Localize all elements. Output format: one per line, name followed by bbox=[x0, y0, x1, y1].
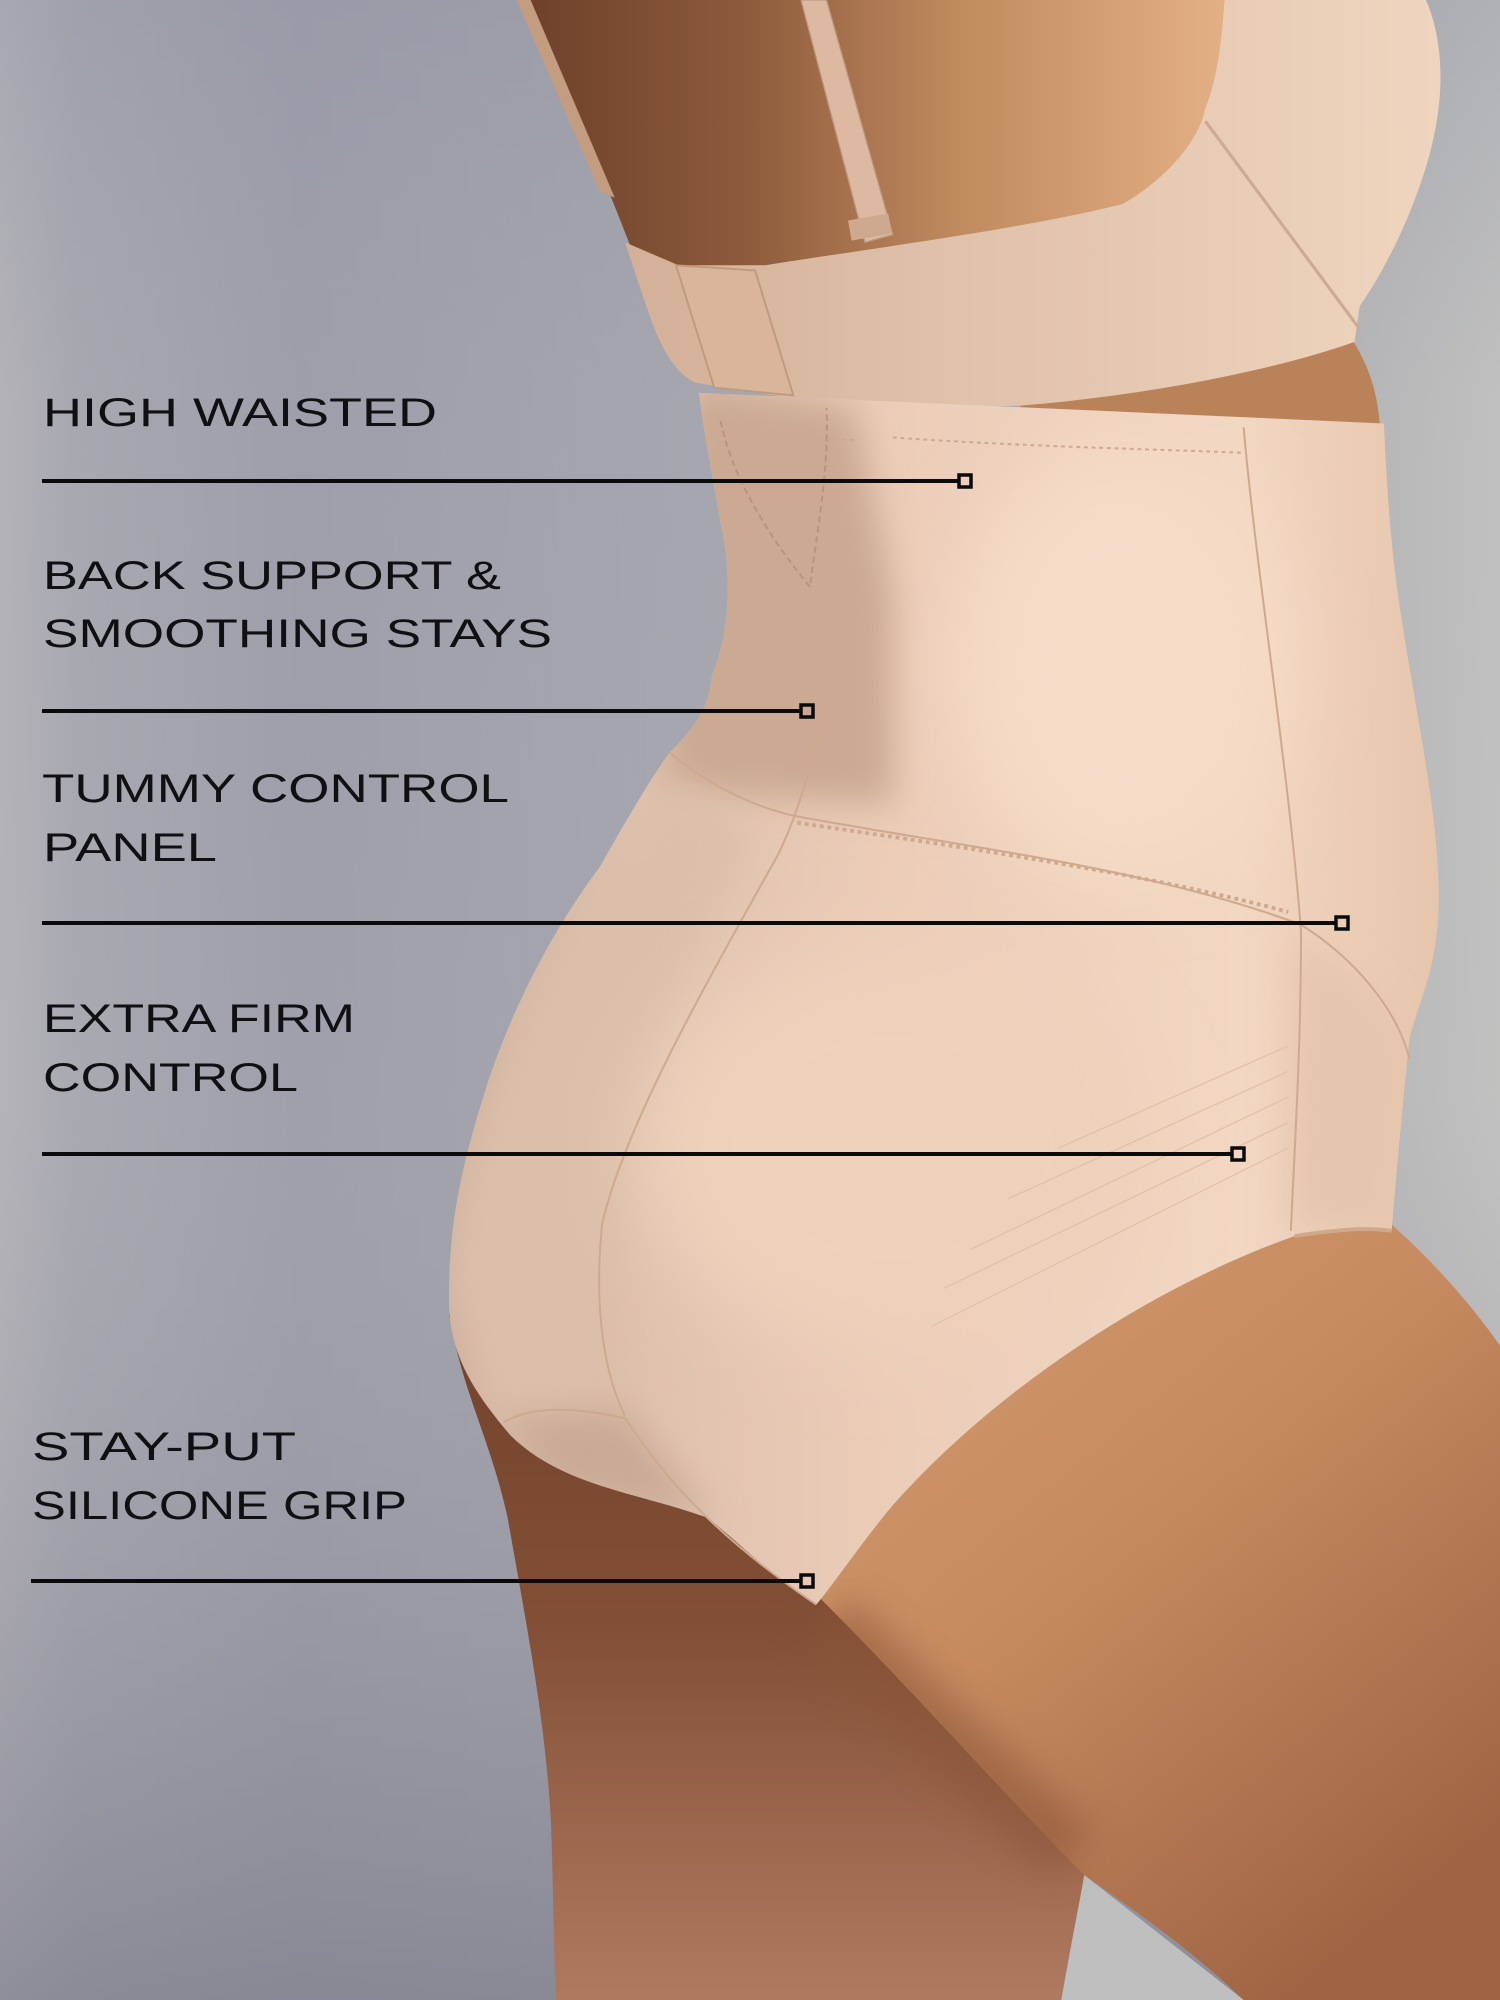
label: SILICONE GRIP bbox=[32, 1484, 407, 1528]
callout: back support bbox=[42, 554, 813, 717]
label bbox=[43, 997, 355, 1100]
label bbox=[32, 1425, 407, 1528]
wall patch between legs bbox=[1061, 1875, 1244, 2000]
callout: high waisted bbox=[42, 391, 971, 487]
leader line bbox=[42, 1148, 1244, 1160]
leader line bbox=[42, 705, 813, 717]
label: STAY-PUT bbox=[32, 1425, 296, 1469]
ribbed control lines bbox=[931, 1046, 1288, 1327]
side strap bbox=[517, 0, 615, 198]
callout: silicone grip bbox=[31, 1425, 813, 1587]
front thigh bbox=[816, 1199, 1500, 2000]
front highlight bbox=[970, 488, 1172, 838]
label: BACK SUPPORT & bbox=[43, 554, 501, 598]
seat highlight bbox=[640, 1002, 826, 1292]
callout: tummy control bbox=[42, 767, 1348, 929]
label: CONTROL bbox=[43, 1056, 298, 1100]
callout: extra firm control bbox=[42, 997, 1244, 1160]
label: HIGH WAISTED bbox=[43, 391, 437, 435]
label: EXTRA FIRM bbox=[43, 997, 355, 1041]
strap slider bbox=[848, 213, 892, 241]
low shadow bbox=[517, 1407, 701, 1514]
back strap bbox=[801, 0, 893, 242]
label bbox=[43, 554, 552, 656]
upper back skin bbox=[526, 0, 1244, 293]
thigh edge shading bbox=[829, 1620, 1071, 1856]
back leg bbox=[449, 1314, 1084, 2000]
leader line bbox=[42, 917, 1348, 929]
cup seam bbox=[1205, 121, 1360, 329]
label: SMOOTHING STAYS bbox=[43, 612, 552, 656]
label bbox=[42, 767, 509, 870]
hip shading bbox=[449, 1072, 524, 1444]
bra bbox=[517, 0, 1440, 407]
photo: model wearing shapewear bbox=[446, 0, 1500, 2000]
skin below bra band bbox=[1020, 339, 1380, 427]
leader line bbox=[42, 475, 971, 487]
label: TUMMY CONTROL bbox=[42, 767, 509, 811]
garment seams bbox=[504, 408, 1409, 1605]
waist shadow bbox=[663, 383, 893, 804]
side panel bbox=[1294, 959, 1357, 1218]
garment bbox=[446, 383, 1439, 1605]
leader line bbox=[31, 1575, 813, 1587]
label: PANEL bbox=[43, 826, 217, 870]
hook and eye panel bbox=[676, 265, 793, 395]
